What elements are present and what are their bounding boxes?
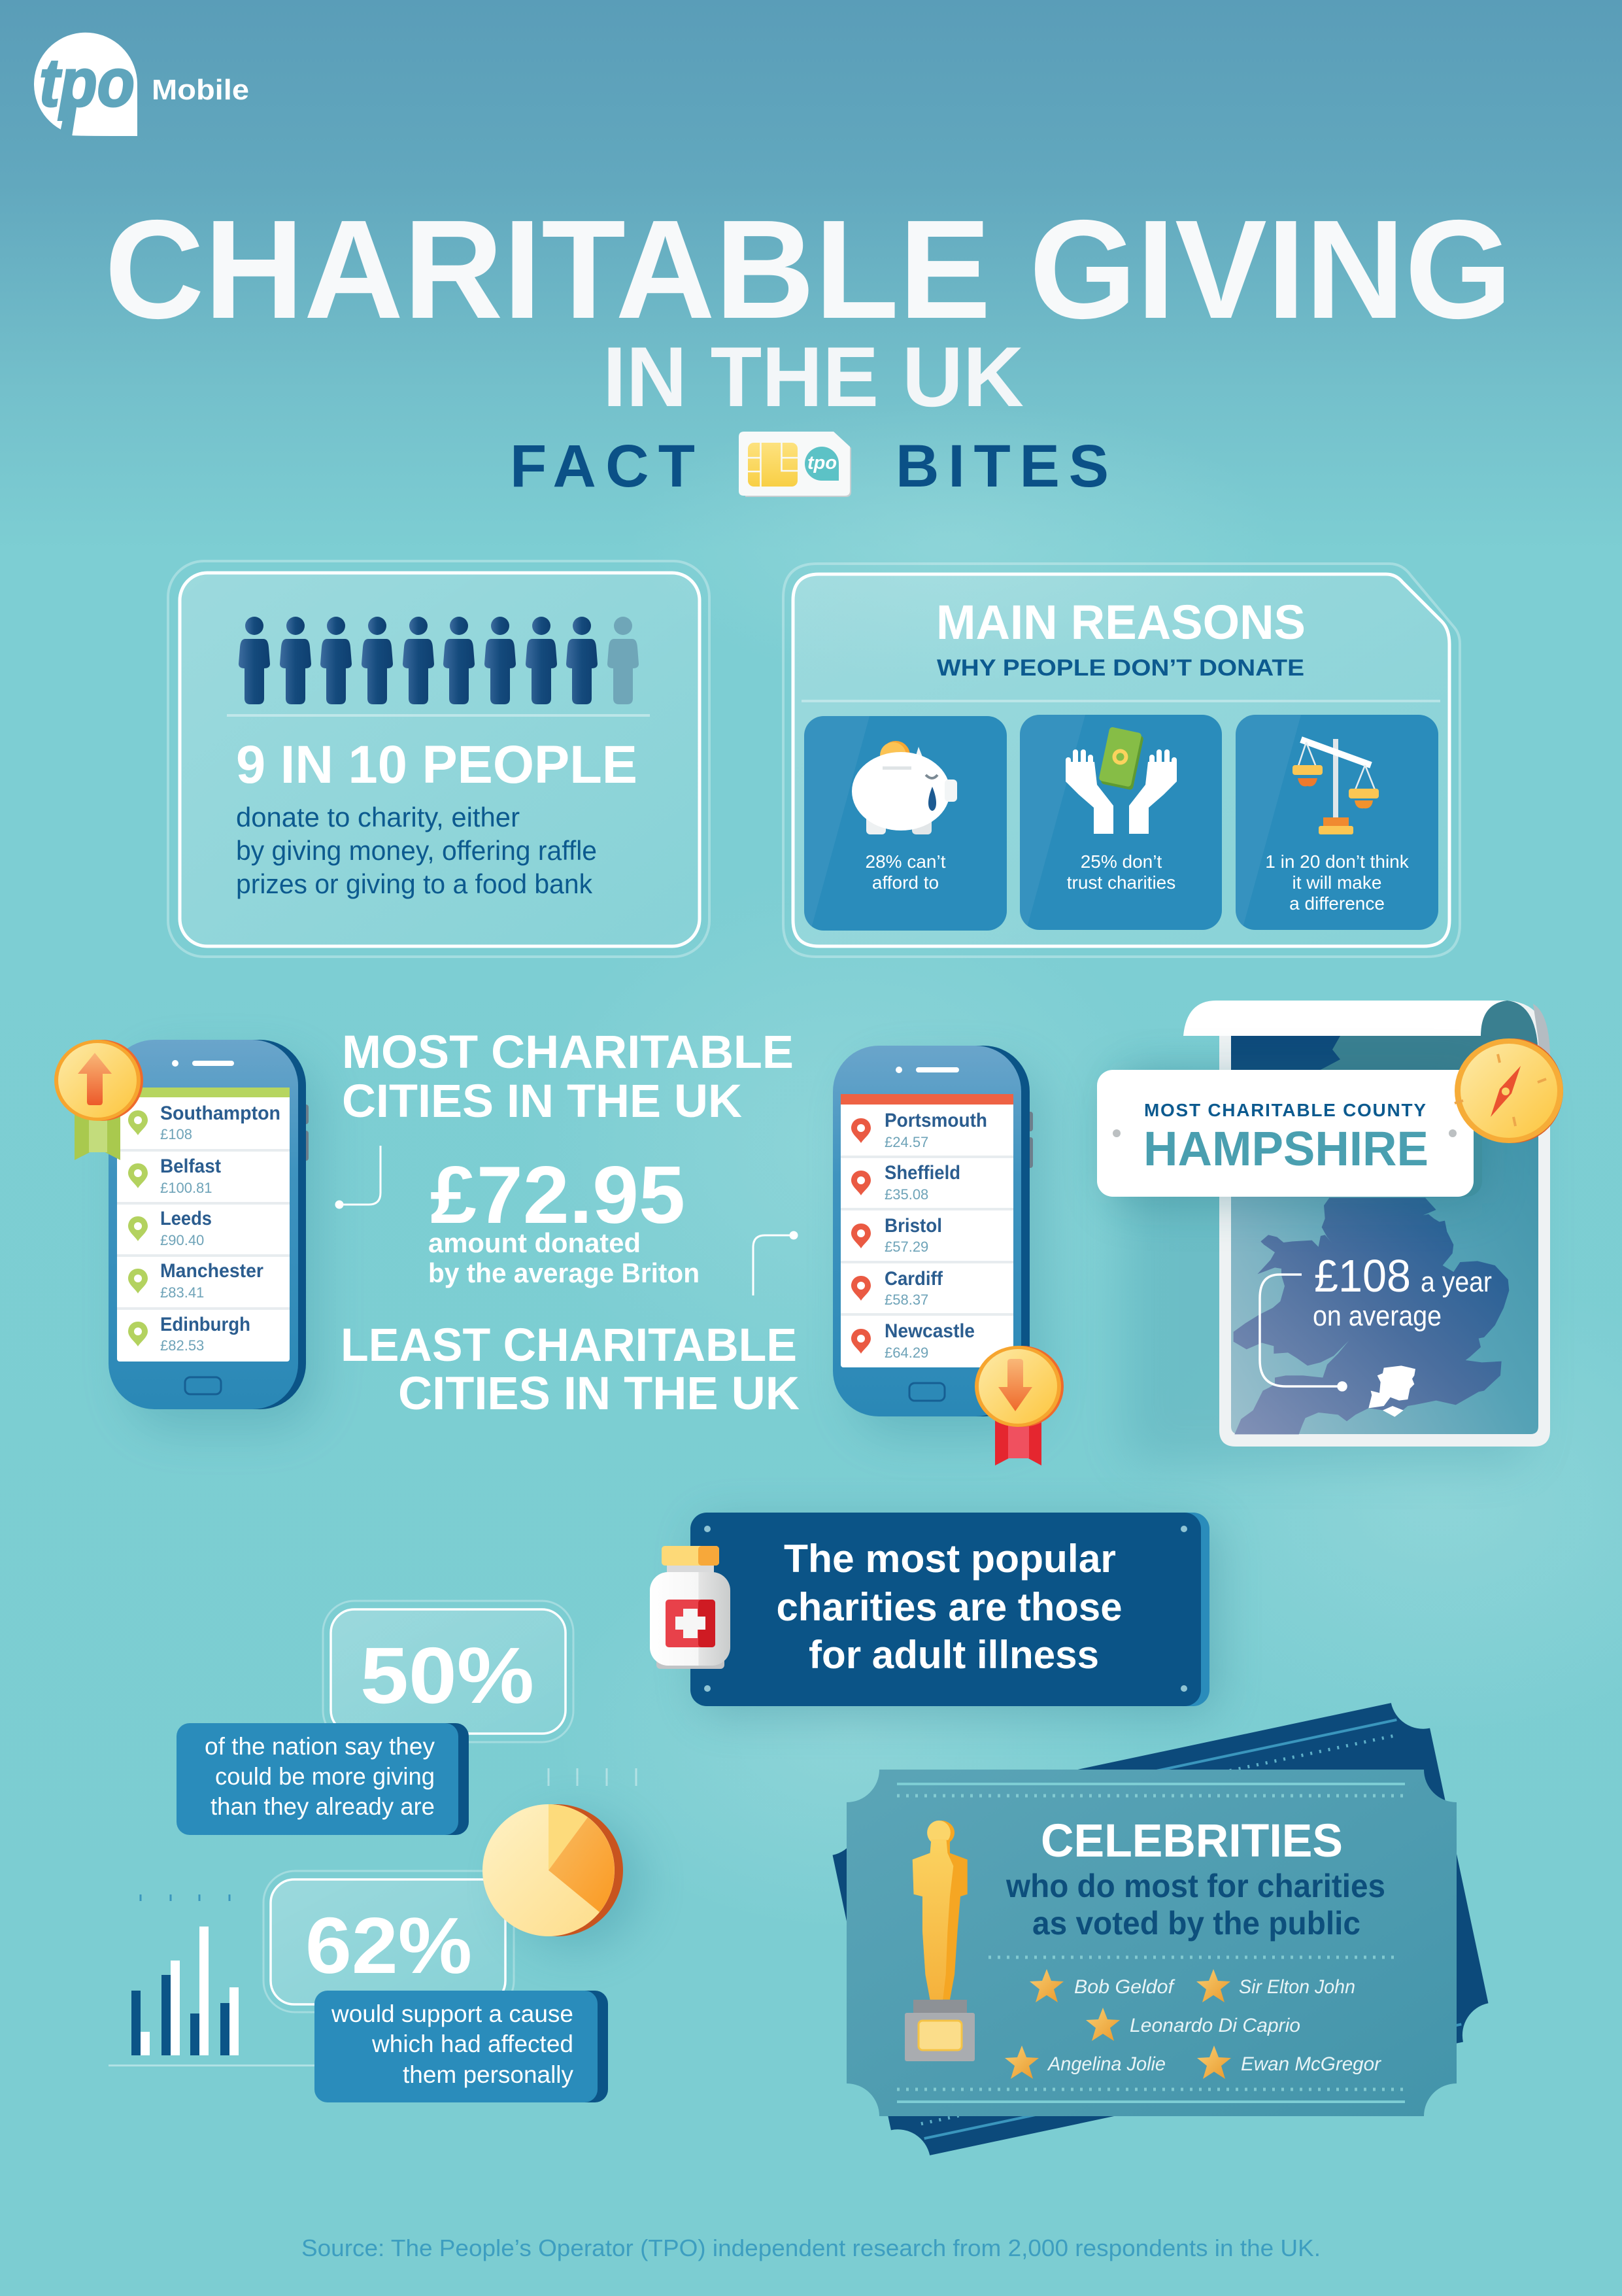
caption: 1 in 20 don’t think xyxy=(1265,851,1410,872)
callout: which had affected xyxy=(371,2030,573,2057)
list: top five cities: Southampton xyxy=(160,1103,280,1124)
card: don't trust xyxy=(1020,715,1222,930)
phone: most charitable cities xyxy=(54,1040,318,1429)
callout: of the nation say they xyxy=(205,1733,435,1760)
list: bottom five cities: £58.37 xyxy=(885,1292,928,1308)
icon: statuette xyxy=(905,1821,975,2061)
icon: hampshire county xyxy=(1368,1365,1415,1417)
card: no difference xyxy=(1236,715,1438,930)
caption: 25% don’t xyxy=(1081,851,1162,872)
stat: 50%: 50% xyxy=(360,1631,534,1720)
stat: £108 a year: a year xyxy=(1421,1266,1492,1298)
list: top five cities xyxy=(128,1103,280,1354)
icon: down medal xyxy=(975,1346,1064,1465)
subtitle: fact bites xyxy=(510,432,1109,500)
list of celebrities: Angelina Jolie xyxy=(1047,2053,1166,2075)
list: top five cities: £100.81 xyxy=(160,1180,212,1196)
list: bottom five cities: £35.08 xyxy=(885,1186,928,1203)
list: top five cities: £82.53 xyxy=(160,1337,204,1354)
average donation: amount donated xyxy=(428,1227,641,1258)
title xyxy=(105,190,1512,424)
banner: most charitable county: HAMPSHIRE xyxy=(1143,1122,1428,1176)
subtitle: fact bites: FACT xyxy=(510,433,695,500)
list: bottom five cities: Sheffield xyxy=(885,1162,960,1184)
caption: a difference xyxy=(1289,893,1385,914)
pie chart xyxy=(482,1768,641,1949)
icon: scales xyxy=(1293,739,1379,834)
panel: celebrities ticket xyxy=(826,1696,1495,2162)
connector: upper xyxy=(336,1146,380,1208)
heading: least charitable cities xyxy=(341,1320,800,1420)
connector xyxy=(1260,1275,1346,1390)
average donation: £72.95 xyxy=(430,1150,685,1241)
text: for adult illness xyxy=(809,1633,1099,1677)
logo: tpo Mobile xyxy=(34,33,249,137)
icon: medicine bottle xyxy=(650,1546,730,1669)
list: bottom five cities: Cardiff xyxy=(885,1268,943,1290)
heading: least charitable cities: LEAST CHARITABLE xyxy=(341,1320,797,1371)
list: top five cities: £83.41 xyxy=(160,1284,204,1301)
subheading: WHY PEOPLE DON’T DONATE xyxy=(937,655,1304,681)
stat: £108 a year xyxy=(1313,1250,1492,1332)
callout xyxy=(177,1723,469,1835)
text: charities are those xyxy=(777,1585,1122,1629)
stat heading: 9 IN 10 PEOPLE xyxy=(236,735,637,795)
back ticket xyxy=(826,1696,1495,2162)
subtitle: fact bites: tpo xyxy=(807,453,837,473)
icon: ten people row xyxy=(239,617,639,704)
banner: most charitable county: MOST CHARITABLE COUNTY xyxy=(1144,1100,1426,1120)
list: bottom five cities: £64.29 xyxy=(885,1345,928,1361)
stat: £108 a year: £108 xyxy=(1314,1250,1411,1301)
description: by giving money, offering raffle xyxy=(236,835,597,866)
text xyxy=(777,1537,1122,1677)
heading: most charitable cities xyxy=(342,1027,794,1127)
list: top five cities: £108 xyxy=(160,1126,192,1142)
average donation: by the average Briton xyxy=(428,1258,700,1288)
card: can't afford xyxy=(804,716,1007,931)
icon: piggy bank xyxy=(852,741,957,834)
list: top five cities: Belfast xyxy=(160,1156,221,1177)
icon: hands with money xyxy=(1066,727,1177,834)
text: The most popular xyxy=(784,1537,1116,1581)
banner: most charitable county xyxy=(1097,1070,1482,1203)
list of celebrities xyxy=(1005,1969,1381,2079)
panel: most popular charities xyxy=(650,1513,1216,1713)
list: top five cities: Manchester xyxy=(160,1260,263,1282)
bar chart xyxy=(109,1894,314,2066)
phone: least charitable cities xyxy=(833,1046,1064,1465)
list: bottom five cities: Portsmouth xyxy=(885,1110,987,1131)
page curl xyxy=(1183,1001,1507,1036)
title: CHARITABLE GIVING xyxy=(105,190,1512,348)
map xyxy=(1231,1001,1538,1434)
list: top five cities: Edinburgh xyxy=(160,1314,250,1335)
average donation xyxy=(428,1150,700,1288)
description: donate to charity, either xyxy=(236,802,520,832)
callout: would support a cause xyxy=(331,2000,573,2027)
caption: 28% can’t xyxy=(866,851,946,872)
list of celebrities: Sir Elton John xyxy=(1239,1976,1355,1998)
subheading xyxy=(1005,1868,1385,1942)
caption: it will make xyxy=(1293,872,1381,893)
icon: up medal xyxy=(54,1040,143,1160)
logo: tpo Mobile: tpo xyxy=(39,45,135,121)
callout: than they already are xyxy=(211,1793,435,1820)
panel: map of hampshire xyxy=(1097,1001,1563,1465)
list: top five cities: £90.40 xyxy=(160,1232,204,1248)
heading: most charitable cities: CITIES IN THE UK xyxy=(342,1076,742,1127)
list: bottom five cities: Bristol xyxy=(885,1215,942,1237)
caption: trust charities xyxy=(1067,872,1175,893)
list: bottom five cities xyxy=(851,1110,987,1361)
heading: MAIN REASONS xyxy=(936,595,1306,649)
connector: lower xyxy=(753,1232,797,1295)
heading: CELEBRITIES xyxy=(1041,1815,1343,1867)
description: prizes or giving to a food bank xyxy=(236,868,593,899)
list of celebrities: Ewan McGregor xyxy=(1241,2053,1381,2075)
subheading: who do most for charities xyxy=(1005,1868,1385,1904)
panel: main reasons xyxy=(783,564,1460,957)
list: top five cities: Leeds xyxy=(160,1208,212,1229)
list: bottom five cities: £57.29 xyxy=(885,1239,928,1255)
subtitle: fact bites: BITES xyxy=(896,433,1109,500)
list of celebrities: Bob Geldof xyxy=(1074,1976,1175,1998)
list of celebrities: Leonardo Di Caprio xyxy=(1130,2015,1300,2036)
list: bottom five cities: Newcastle xyxy=(885,1320,975,1342)
callout: could be more giving xyxy=(215,1763,435,1790)
subheading: as voted by the public xyxy=(1032,1905,1360,1942)
logo: tpo Mobile: Mobile xyxy=(152,74,249,106)
description xyxy=(236,802,597,899)
heading: least charitable cities: CITIES IN THE UK xyxy=(398,1368,800,1420)
panel: 9 in 10 people xyxy=(168,561,709,957)
front ticket xyxy=(847,1770,1457,2116)
caption: afford to xyxy=(872,872,939,893)
callout xyxy=(314,1991,608,2102)
source: Source: The People’s Operator (TPO) independent research from 2,000 respondents in the UK. xyxy=(301,2235,1321,2261)
stat: 50% xyxy=(177,1601,573,1835)
heading: most charitable cities: MOST CHARITABLE xyxy=(342,1027,794,1078)
callout: them personally xyxy=(403,2061,573,2088)
icon: compass xyxy=(1455,1038,1563,1143)
stat: £108 a year: on average xyxy=(1313,1300,1442,1332)
stat: 62%: 62% xyxy=(305,1901,472,1990)
list: bottom five cities: £24.57 xyxy=(885,1134,928,1150)
title: IN THE UK xyxy=(603,329,1024,424)
stat: 62% xyxy=(263,1871,608,2102)
